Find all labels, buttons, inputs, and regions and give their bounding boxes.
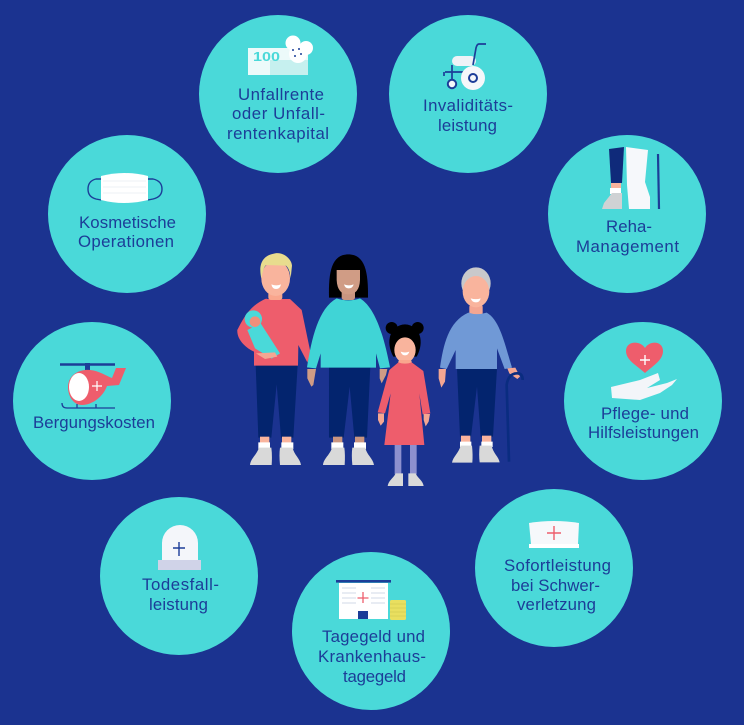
icon: banknote with plaster: 100	[253, 49, 280, 64]
panel: Pflege- und Hilfsleistungen	[564, 322, 722, 480]
label: Todesfallleistung: leistung	[149, 595, 208, 614]
label: Invaliditätsleistung	[423, 96, 513, 135]
label: Invaliditätsleistung: leistung	[438, 116, 497, 135]
figure: mother	[307, 254, 390, 465]
icon: hand holding heart	[611, 343, 677, 400]
label: Tagegeld und Krankenhaustagegeld	[318, 627, 426, 686]
figure: grandfather with cane	[439, 267, 523, 463]
label: Invaliditätsleistung: Invaliditäts-	[423, 96, 513, 115]
label: Kosmetische Operationen	[78, 213, 176, 251]
panel: Bergungskosten	[13, 322, 171, 480]
label: Todesfallleistung	[142, 575, 219, 614]
panel: Kosmetische Operationen	[48, 135, 206, 293]
label: Reha-Management	[576, 217, 679, 256]
figure: father with baby	[237, 253, 311, 465]
label: Pflege- und Hilfsleistungen: Hilfsleistungen	[588, 423, 699, 442]
label: Kosmetische Operationen: Kosmetische	[79, 213, 176, 232]
panel: Tagegeld	[292, 552, 450, 710]
icon: gravestone	[158, 525, 201, 570]
label: Sofortleistung bei Schwerverletzung: verletzung	[517, 595, 596, 614]
label: Reha-Management: Management	[576, 237, 679, 256]
label: Tagegeld und Krankenhaustagegeld: Tagegeld und	[322, 627, 425, 646]
icon: wheelchair	[444, 44, 486, 90]
panel: Unfallrente	[199, 15, 357, 173]
label: Unfallrente	[227, 85, 329, 143]
icon: nurse cap	[529, 521, 579, 548]
icon: helicopter	[60, 363, 126, 408]
label: Sofortleistung bei Schwerverletzung: Sofortleistung	[504, 556, 611, 575]
label: Kosmetische Operationen: Operationen	[78, 232, 174, 251]
panel: Reha-Management	[548, 135, 706, 293]
label: Pflege- und Hilfsleistungen: Pflege- und	[601, 404, 689, 423]
label: Reha-Management: Reha-	[606, 217, 652, 236]
label: Pflege- und Hilfsleistungen	[588, 404, 699, 442]
label: Tagegeld und Krankenhaustagegeld: Krankenhaus-	[318, 647, 426, 666]
label: Unfallrente: oder Unfall-	[232, 104, 325, 123]
label: Bergungskosten: Bergungskosten	[33, 413, 155, 432]
label: Todesfallleistung: Todesfall-	[142, 575, 219, 594]
label: Unfallrente: Unfallrente	[238, 85, 324, 104]
icon: leg in cast with crutch	[602, 147, 659, 209]
label: Sofortleistung bei Schwerverletzung: bei Schwer-	[511, 576, 600, 595]
icon: hospital and coins	[336, 580, 406, 620]
icon: banknote with plaster	[248, 36, 313, 75]
panel: Todesfallleistung	[100, 497, 258, 655]
panel: Invaliditätsleistung	[389, 15, 547, 173]
panel: Sofortleistung	[475, 489, 633, 647]
figure: child	[378, 322, 430, 486]
label: Tagegeld und Krankenhaustagegeld: tagegeld	[343, 667, 406, 686]
family illustration	[237, 253, 523, 486]
icon: face mask	[88, 173, 162, 203]
label: Unfallrente: rentenkapital	[227, 124, 329, 143]
label: Sofortleistung bei Schwerverletzung	[504, 556, 611, 614]
